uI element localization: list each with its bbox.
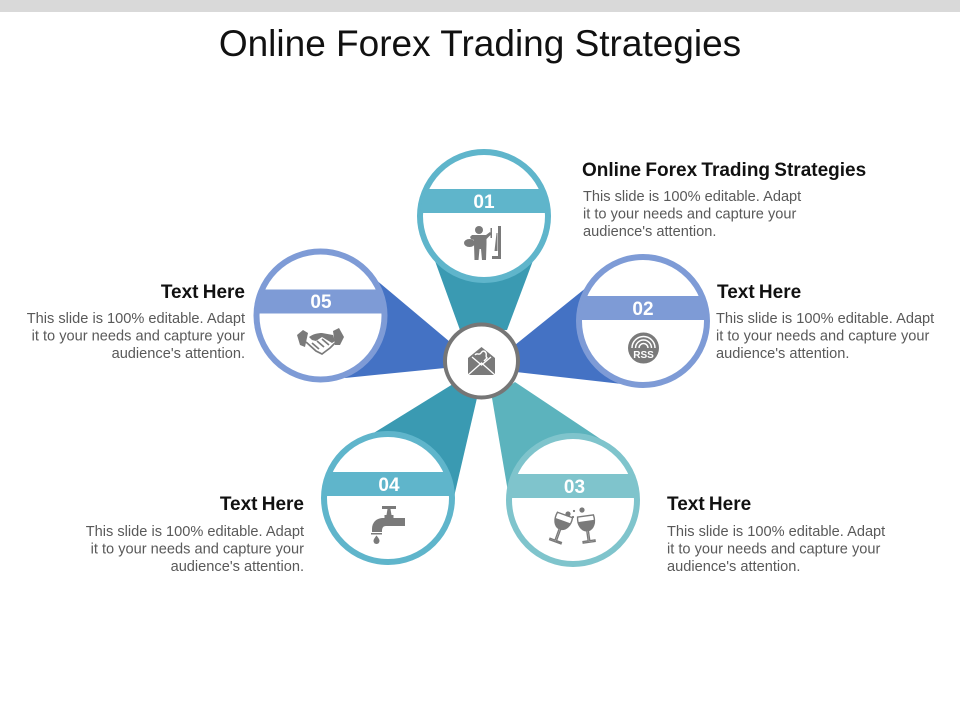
wedge 03 [492,382,602,492]
body 02: audience's attention. [716,346,849,362]
wedge 01 [431,250,537,330]
body 05: audience's attention. [112,346,245,362]
body 05: This slide is 100% editable. Adapt [27,311,245,327]
number 04: 04 [378,475,400,496]
body 03: it to your needs and capture your [667,542,881,558]
number 02: 02 [632,299,654,320]
heading 02: Text Here [717,282,801,303]
body 03: This slide is 100% editable. Adapt [667,524,885,540]
number 01: 01 [473,192,495,213]
circle 05 [254,252,388,380]
circle 02 [577,257,711,385]
callout 01 [582,160,866,240]
callout 03 [667,494,885,575]
wedge 05 [345,279,450,378]
number 03: 03 [564,477,585,498]
heading 05: Text Here [161,282,245,303]
body 02: it to your needs and capture your [716,328,930,344]
callout 02 [716,282,934,362]
wedge 02 [515,283,622,384]
callout 05 [27,282,245,362]
number 05: 05 [310,292,332,313]
heading 03: Text Here [667,494,751,515]
body 05: it to your needs and capture your [32,328,245,344]
body 03: audience's attention. [667,559,800,575]
circle 03 [507,436,641,564]
icon: clinking wine glasses [547,507,598,545]
heading 04: Text Here [220,494,304,515]
title: Online Forex Trading Strategies [219,23,741,64]
body 01: This slide is 100% editable. Adapt [583,189,801,205]
circle 01 [417,152,551,280]
body 01: it to your needs and capture your [583,206,797,222]
callout 04 [86,494,304,575]
body 04: audience's attention. [171,559,304,575]
icon: water tap [371,506,405,544]
body 02: This slide is 100% editable. Adapt [716,311,934,327]
wedge 04 [372,384,477,497]
body 04: This slide is 100% editable. Adapt [86,524,304,540]
icon: painter at easel [464,226,501,260]
centre hub [445,324,518,398]
body 01: audience's attention. [583,224,716,240]
icon: handshake [297,328,344,354]
body 04: it to your needs and capture your [91,542,304,558]
heading 01: Online Forex Trading Strategies [582,160,866,181]
circle 04 [322,434,456,562]
icon: RSS badge: RSS [633,350,654,361]
icon: open envelope with money [468,347,495,375]
top grey bar [0,0,960,12]
